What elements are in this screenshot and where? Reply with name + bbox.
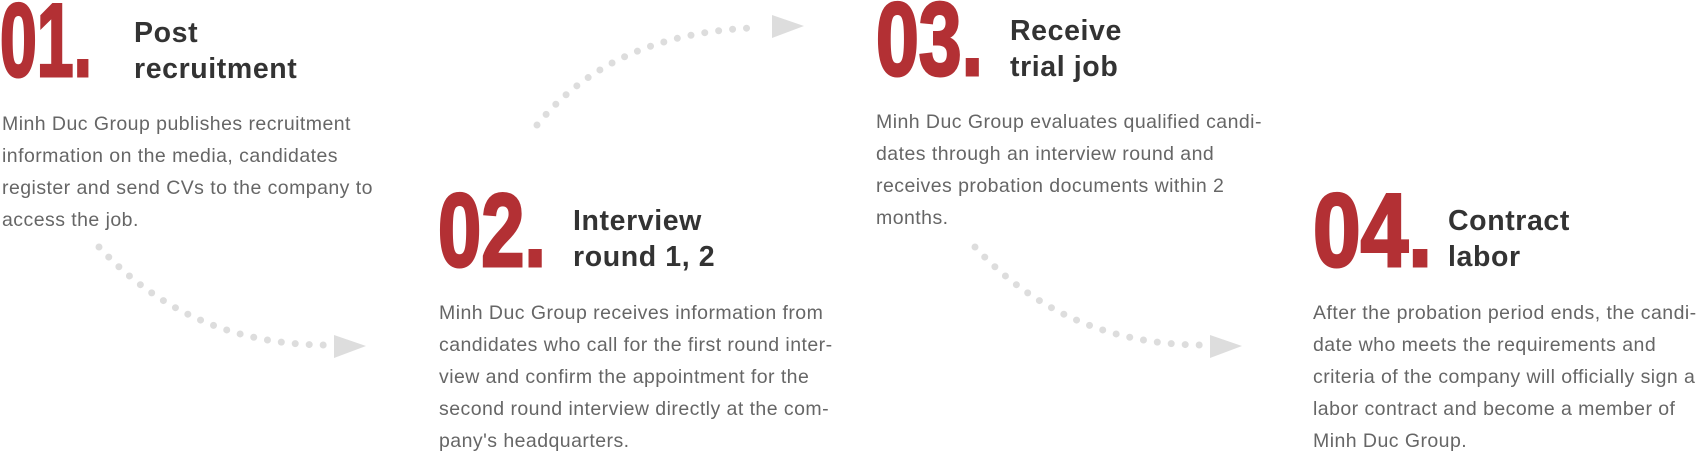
title 04 <box>1448 205 1570 273</box>
number 02: 02. <box>438 173 546 289</box>
text 02: pany's headquarters. <box>439 430 630 452</box>
title 03: Receive <box>1010 15 1122 47</box>
title 03 <box>1010 15 1122 83</box>
text 02 <box>439 302 833 452</box>
text 03: Minh Duc Group evaluates qualified candi- <box>876 111 1262 133</box>
text 04 <box>1313 302 1697 452</box>
text 03: receives probation documents within 2 <box>876 175 1224 197</box>
number 04: 04. <box>1313 173 1432 289</box>
arrow: 03 to 04 <box>975 247 1242 358</box>
title 01: recruitment <box>134 53 297 85</box>
text 01 <box>2 113 373 231</box>
text 02: second round interview directly at the com- <box>439 398 829 420</box>
title 03: trial job <box>1010 51 1118 83</box>
text 02: view and confirm the appointment for the <box>439 366 809 388</box>
text 01: information on the media, candidates <box>2 145 338 167</box>
arrow: 01 to 02 <box>99 247 366 358</box>
title 01: Post <box>134 17 198 49</box>
text 04: After the probation period ends, the candi- <box>1313 302 1697 324</box>
text 01: register and send CVs to the company to <box>2 177 373 199</box>
text 03: months. <box>876 207 949 229</box>
title 02: Interview <box>573 205 702 237</box>
text 03 <box>876 111 1262 229</box>
text 04: criteria of the company will officially sign a <box>1313 366 1695 388</box>
text 02: Minh Duc Group receives information from <box>439 302 823 324</box>
text 03: dates through an interview round and <box>876 143 1214 165</box>
text 01: access the job. <box>2 209 139 231</box>
text 04: date who meets the requirements and <box>1313 334 1656 356</box>
title 02 <box>573 205 715 273</box>
title 04: labor <box>1448 241 1521 273</box>
text 01: Minh Duc Group publishes recruitment <box>2 113 351 135</box>
text 04: labor contract and become a member of <box>1313 398 1675 420</box>
text 04: Minh Duc Group. <box>1313 430 1467 452</box>
title 02: round 1, 2 <box>573 241 715 273</box>
title 01 <box>134 17 297 85</box>
arrow: 02 to 03 <box>537 15 804 125</box>
text 02: candidates who call for the first round inter- <box>439 334 833 356</box>
title 04: Contract <box>1448 205 1570 237</box>
